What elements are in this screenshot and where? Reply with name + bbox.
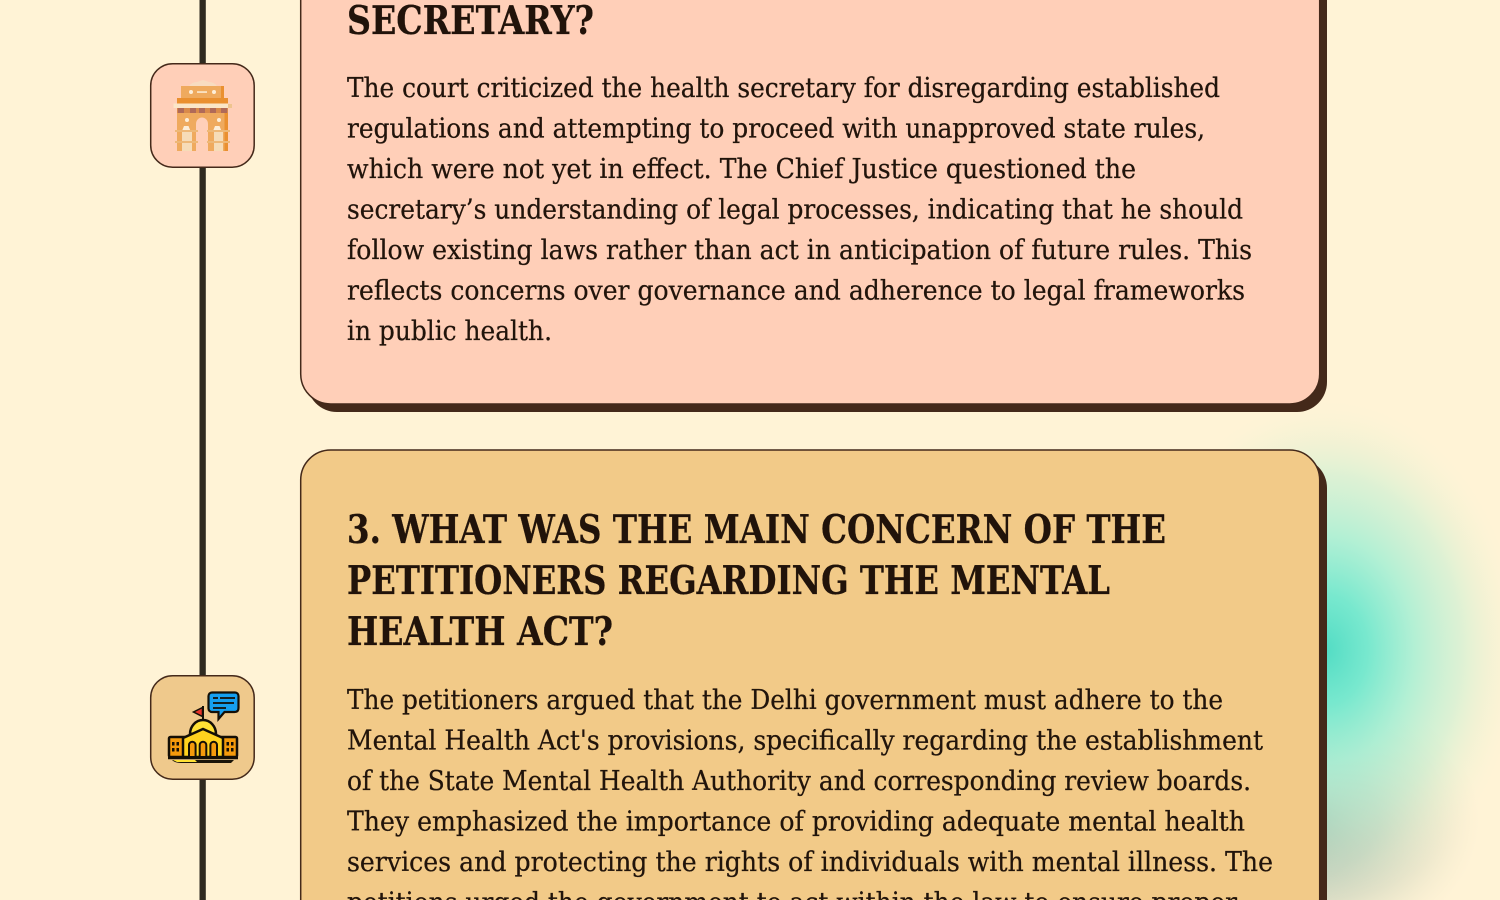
text block: answer 3	[347, 684, 1273, 900]
text block: answer 3: Mental Health Act's provisions, specifically regarding the establishment	[347, 724, 1263, 756]
text block: answer 3: They emphasized the importance of providing adequate mental health	[347, 806, 1245, 838]
text block: answer 2: in public health.	[347, 315, 552, 347]
heading: question 3: HEALTH ACT?	[347, 609, 613, 655]
text block: answer 3: of the State Mental Health Authority and corresponding review boards.	[347, 765, 1251, 797]
text block: answer 2: reflects concerns over governance and adherence to legal frameworks	[347, 274, 1245, 306]
text block: answer 2: secretary’s understanding of legal processes, indicating that he should	[347, 194, 1243, 226]
icon: government building with speech bubble	[151, 676, 254, 779]
heading: question 3: PETITIONERS REGARDING THE MENTAL	[347, 558, 1110, 604]
decorative glow behind card 3	[1130, 400, 1500, 900]
text block: answer 2: The court criticized the health secretary for disregarding established	[347, 72, 1220, 104]
text block: answer 3: services and protecting the rights of individuals with mental illness. The	[347, 846, 1273, 878]
text block: answer 3: The petitioners argued that the Delhi government must adhere to the	[347, 684, 1223, 716]
text block: answer 2: follow existing laws rather than act in anticipation of future rules. This	[347, 234, 1252, 266]
text block: answer 2: which were not yet in effect. The Chief Justice questioned the	[347, 153, 1136, 185]
panel: question 2 card	[301, 0, 1327, 412]
heading: question 3: 3. WHAT WAS THE MAIN CONCERN OF THE	[347, 507, 1166, 553]
timeline line	[200, 0, 206, 900]
card 3 shape	[301, 450, 1327, 900]
text block: answer 2: regulations and attempting to proceed with unapproved state rules,	[347, 112, 1205, 144]
text block: answer 2	[347, 72, 1252, 347]
panel: question 3 card	[301, 450, 1327, 900]
icon: India Gate monument	[151, 64, 254, 167]
heading: question 3	[347, 507, 1166, 655]
card 2 shape	[301, 0, 1327, 412]
